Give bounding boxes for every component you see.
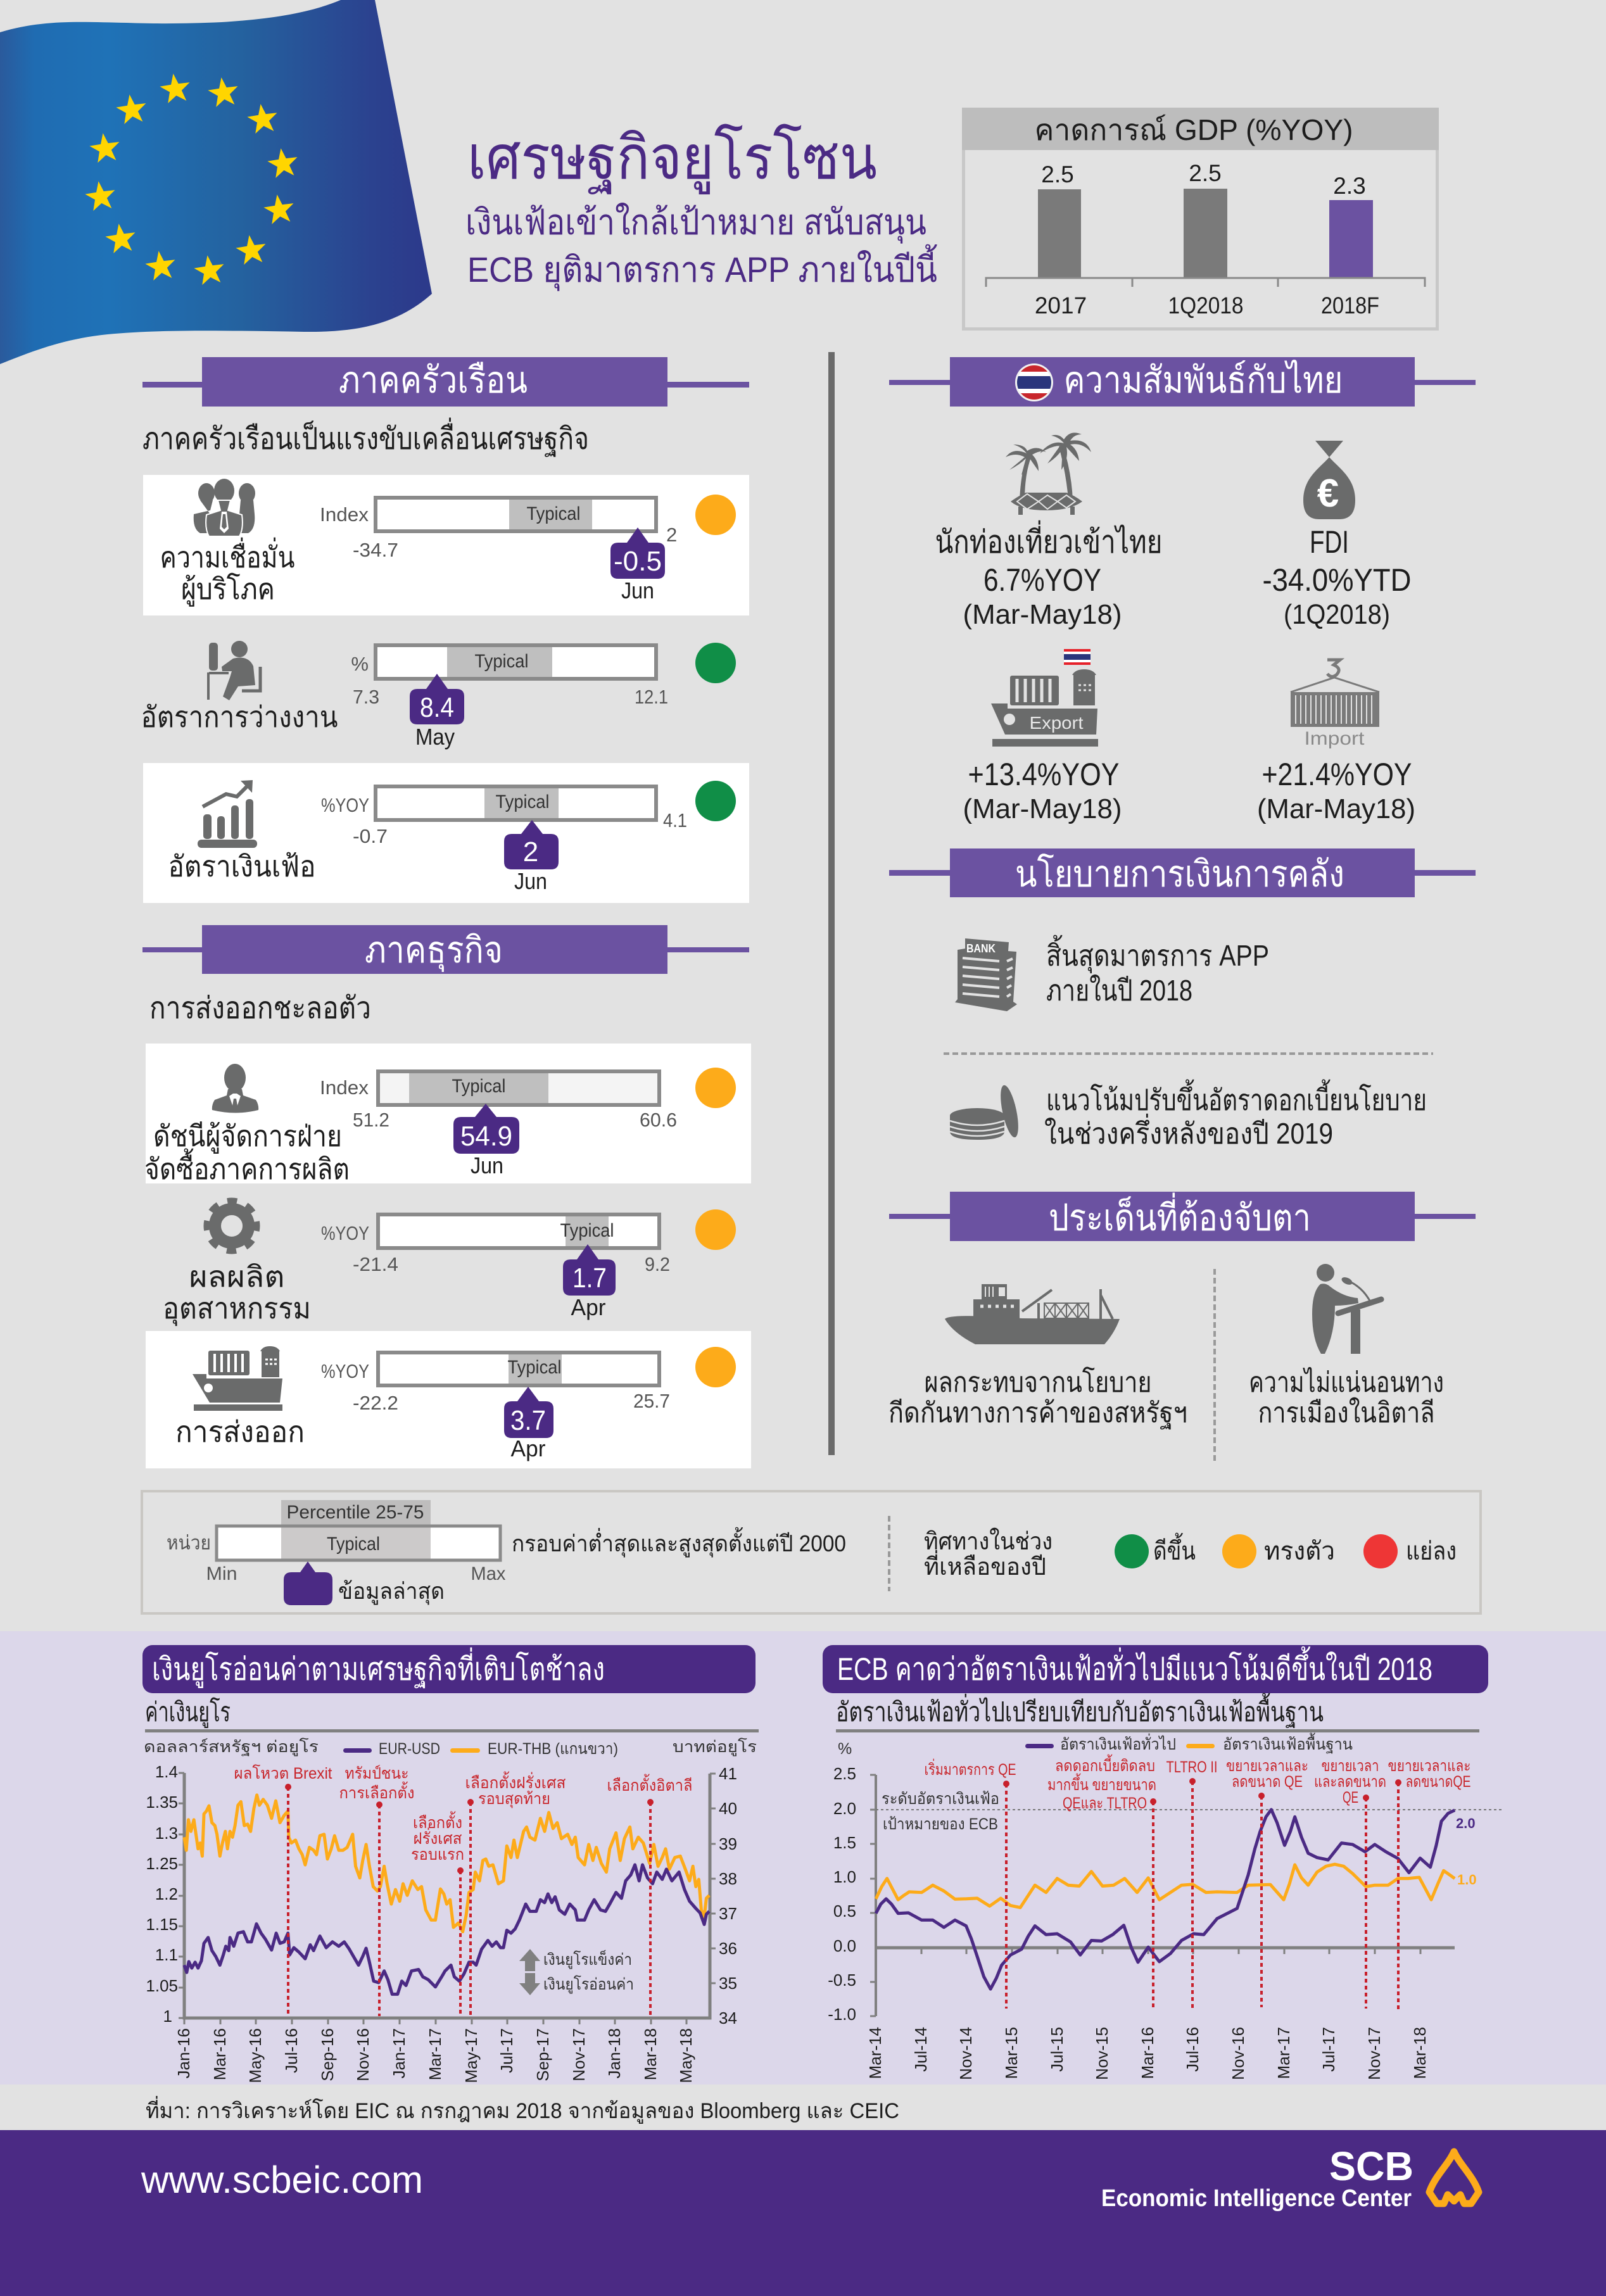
- icon: rising chart: [198, 780, 257, 848]
- heading: euro chart: [142, 1645, 756, 1693]
- line: core inflation: [876, 1864, 1455, 1908]
- axes: euro: 1: [163, 2007, 172, 2026]
- item: tourists: [935, 432, 1163, 630]
- range bar: inflation: 4.1: [663, 809, 687, 831]
- legend: direction heading: [924, 1528, 1053, 1580]
- heading: issues to watch: ประเด็นที่ต้องจับตา: [1049, 1192, 1311, 1239]
- label: consumer confidence: [160, 537, 295, 607]
- range bar: consumer confidence: [320, 498, 677, 561]
- axes: euro: Mar-17: [426, 2028, 445, 2080]
- range bar: exports: Typical: [508, 1357, 561, 1378]
- item: end of APP: [955, 935, 1269, 1011]
- chart legend: euro: ดอลลาร์สหรัฐฯ ต่อยูโร: [144, 1738, 319, 1757]
- title: [465, 124, 937, 291]
- axes: inflation: Jul-15: [1047, 2027, 1066, 2072]
- legend: range note: กรอบค่าต่ำสุดและสูงสุดตั้งแต่ปี 2000: [512, 1527, 846, 1558]
- panel: PMI: [144, 1044, 751, 1185]
- range bar: industrial production: %YOY: [321, 1222, 369, 1244]
- range bar: unemployment: 12.1: [635, 686, 668, 708]
- chart legend: inflation: อัตราเงินเฟ้อพื้นฐาน: [1223, 1732, 1353, 1753]
- annotations: ECB events: ขยายเวลาและ: [1226, 1757, 1308, 1775]
- annotations: ECB events: มากขึ้น ขยายขนาด: [1047, 1773, 1156, 1794]
- axes: euro: 1.4: [155, 1762, 178, 1781]
- icon: export ship: [991, 649, 1098, 747]
- item: exports to Thailand link: [963, 649, 1122, 824]
- item: tourists: (Mar-May18): [963, 599, 1122, 630]
- annotations: euro events: การเลือกตั้ง: [339, 1781, 414, 1802]
- label: industrial production: [163, 1260, 311, 1327]
- icon: businessman: [212, 1064, 258, 1113]
- heading: inflation chart: [823, 1645, 1488, 1693]
- axes: euro: Sep-17: [533, 2028, 552, 2081]
- label: PMI: จัดซื้อภาคการผลิต: [144, 1148, 350, 1185]
- axes: inflation: 1.0: [833, 1867, 856, 1886]
- chart legend: inflation: [838, 1732, 1353, 1758]
- range bar: PMI: [320, 1071, 677, 1131]
- axes: euro: 35: [719, 1974, 737, 1993]
- panel: inflation: [143, 763, 749, 903]
- item: Italian politics: [1249, 1264, 1444, 1429]
- bar chart: GDP: 1Q2018: [1168, 293, 1244, 319]
- marker: 2 Jun: Jun: [514, 868, 547, 894]
- annotation: ECB target: เป้าหมายของ ECB: [883, 1815, 998, 1833]
- axes: euro: Jan-16: [174, 2028, 193, 2078]
- marker: -0.5 Jun: -0.5: [614, 546, 662, 577]
- marker: 54.9 Jun: 54.9: [460, 1121, 512, 1152]
- icon: Thai flag: [1013, 363, 1055, 401]
- annotation: ECB target: [882, 1790, 999, 1833]
- item: US trade barriers: [888, 1284, 1187, 1429]
- icon: strengthen and weaken arrows: [519, 1949, 634, 1995]
- axes: euro: 1.05: [146, 1976, 178, 1995]
- chart legend: euro: บาทต่อยูโร: [673, 1738, 757, 1757]
- axes: inflation: Mar-15: [1002, 2027, 1021, 2079]
- legend: marker: [284, 1561, 445, 1605]
- icon: bank building: BANK: [966, 942, 996, 955]
- axes: euro: 36: [719, 1939, 737, 1958]
- annotations: euro events: ฝรั่งเศส: [413, 1827, 462, 1848]
- axes: euro: May-16: [246, 2028, 265, 2083]
- range bar: PMI: 51.2: [353, 1109, 389, 1131]
- logo: SCB: [1101, 2143, 1479, 2212]
- annotations: ECB events: QEและ TLTRO: [1063, 1795, 1147, 1812]
- bar chart: GDP: 2.3: [1333, 173, 1366, 199]
- axes: euro: 38: [719, 1869, 737, 1888]
- legend: sample bar: Min: [206, 1563, 237, 1584]
- range bar: inflation: [321, 786, 687, 847]
- item: tourists: นักท่องเที่ยวเข้าไทย: [935, 520, 1163, 560]
- range bar: consumer confidence: Index: [320, 503, 369, 526]
- axes: inflation: -0.5: [828, 1971, 856, 1990]
- marker: 8.4 May: [410, 674, 464, 750]
- label: PMI: ดัชนีผู้จัดการฝ่าย: [153, 1120, 342, 1154]
- annotation: ECB target: ระดับอัตราเงินเฟ้อ: [882, 1790, 999, 1808]
- subtitle: [465, 202, 937, 291]
- logo: SCB: SCB: [1329, 2143, 1413, 2189]
- panel: euro chart: [142, 1645, 759, 2083]
- item: rate hike outlook: [950, 1079, 1427, 1150]
- axes: euro: 1.3: [155, 1824, 178, 1843]
- annotations: ECB events: ขยายเวลาและ: [1388, 1757, 1470, 1775]
- status dot: stable: [695, 1209, 736, 1250]
- heading: euro chart: เงินยูโรอ่อนค่าตามเศรษฐกิจที่เติบโตช้าลง: [152, 1648, 605, 1688]
- title: เศรษฐกิจยูโรโซน: [467, 124, 877, 195]
- icon: cargo ship: [945, 1284, 1120, 1344]
- panel: inflation chart: [823, 1645, 1502, 2080]
- icon: speaker at podium: [1312, 1264, 1381, 1354]
- icon: palm hammock: [1006, 432, 1091, 515]
- annotations: euro events: [234, 1764, 693, 2016]
- annotations: euro events: ผลโหวต Brexit: [234, 1764, 332, 1782]
- end labels: 1.0: [1457, 1872, 1477, 1888]
- axes: euro: May-17: [462, 2028, 481, 2083]
- item: Italian politics: ความไม่แน่นอนทาง: [1249, 1366, 1444, 1398]
- icon: import container: Import: [1305, 728, 1365, 749]
- footer: www.scbeic.com: [141, 2159, 423, 2201]
- item: FDI: [1263, 441, 1411, 630]
- panel: consumer confidence: [143, 475, 749, 615]
- marker: 3.7 Apr: Apr: [510, 1435, 546, 1461]
- range bar: industrial production: [321, 1214, 670, 1275]
- bar chart: GDP: 2.5: [1041, 161, 1074, 187]
- chart legend: inflation: อัตราเงินเฟ้อทั่วไป: [1060, 1733, 1176, 1753]
- heading: relations with Thailand: ความสัมพันธ์กับไทย: [1064, 359, 1343, 401]
- annotations: ECB events: TLTRO II: [1167, 1758, 1217, 1776]
- range bar: consumer confidence: Typical: [527, 503, 580, 524]
- heading: issues to watch: [889, 1192, 1476, 1241]
- icon: euro money bag: €: [1317, 472, 1339, 515]
- label: PMI: [144, 1120, 350, 1185]
- annotations: ECB events: [925, 1754, 1470, 2011]
- item: Italian politics: การเมืองในอิตาลี: [1258, 1397, 1435, 1429]
- heading: households: ภาคครัวเรือน: [339, 360, 528, 401]
- heading: business: ภาคธุรกิจ: [365, 930, 503, 973]
- annotations: euro events: ทรัมป์ชนะ: [345, 1765, 409, 1782]
- range bar: PMI: Typical: [452, 1076, 505, 1097]
- item: end of APP: ภายในปี 2018: [1046, 974, 1192, 1007]
- axes: inflation: Nov-16: [1229, 2027, 1248, 2080]
- icon: strengthen and weaken arrows: เงินยูโรอ่อนค่า: [543, 1975, 634, 1994]
- status dot: improving: [695, 781, 736, 821]
- axes: inflation: 2.0: [833, 1799, 856, 1818]
- label: industrial production: อุตสาหกรรม: [163, 1292, 311, 1327]
- annotations: ECB events: ลดขนาดQE: [1406, 1773, 1470, 1791]
- axes: euro: Sep-16: [318, 2028, 337, 2081]
- footer: [0, 2130, 1606, 2296]
- range bar: consumer confidence: 2: [666, 524, 677, 546]
- axes: inflation: Jul-16: [1183, 2027, 1202, 2072]
- icon: EU flag: [0, 0, 432, 364]
- panel: euro chart: ค่าเงินยูโร: [145, 1696, 231, 1728]
- legend: sample bar: [167, 1502, 505, 1584]
- axes: euro: 1.1: [155, 1945, 178, 1964]
- icon: export ship: Export: [1030, 713, 1084, 733]
- label: inflation: อัตราเงินเฟ้อ: [168, 850, 315, 883]
- label: consumer confidence: ผู้บริโภค: [181, 572, 275, 607]
- axes: inflation: 0.5: [833, 1902, 856, 1921]
- axes: inflation: Nov-15: [1092, 2027, 1111, 2080]
- annotations: euro events: เลือกตั้ง: [413, 1811, 462, 1832]
- legend: [142, 1491, 1481, 1613]
- marker: 54.9 Jun: Jun: [471, 1152, 503, 1178]
- label: unemployment: อัตราการว่างงาน: [141, 700, 338, 733]
- axes: euro: 40: [719, 1799, 737, 1818]
- item: tourists: 6.7%YOY: [983, 562, 1101, 598]
- status dot: improving: [695, 643, 736, 683]
- icon: import container: [1291, 660, 1379, 749]
- range bar: unemployment: %: [351, 653, 369, 675]
- annotations: euro events: เลือกตั้งฝรั่งเศส: [465, 1771, 566, 1792]
- axes: euro: 1.25: [146, 1854, 178, 1873]
- heading: monetary and fiscal policy: นโยบายการเงินการคลัง: [1015, 853, 1344, 895]
- heading: monetary and fiscal policy: [889, 848, 1476, 897]
- range bar: consumer confidence: -34.7: [353, 539, 398, 561]
- range bar: PMI: Index: [320, 1076, 369, 1099]
- heading: business: [142, 925, 749, 974]
- legend: direction dots: ดีขึ้น: [1153, 1532, 1196, 1565]
- range bar: PMI: 60.6: [640, 1109, 677, 1131]
- axes: euro: Nov-16: [353, 2028, 372, 2081]
- axes: euro: 37: [719, 1904, 737, 1923]
- marker: -0.5 Jun: Jun: [621, 577, 654, 603]
- annotations: euro events: รอบสุดท้าย: [478, 1790, 550, 1808]
- heading: inflation chart: ECB คาดว่าอัตราเงินเฟ้อทั่วไปมีแนวโน้มดีขึ้นในปี 2018: [837, 1646, 1432, 1687]
- label: industrial production: ผลผลิต: [189, 1260, 285, 1293]
- legend: direction dots: แย่ลง: [1406, 1537, 1457, 1565]
- legend: sample bar: Typical: [327, 1534, 380, 1555]
- item: imports: [1257, 660, 1415, 824]
- annotations: ECB events: ลดขนาด QE: [1232, 1773, 1303, 1791]
- icon: people: [194, 479, 255, 536]
- marker: 3.7 Apr: [504, 1387, 553, 1461]
- axes: inflation: Nov-17: [1365, 2027, 1384, 2080]
- status dot: stable: [695, 1068, 736, 1108]
- axes: inflation: Jul-14: [911, 2027, 930, 2072]
- icon: coins: [950, 1084, 1021, 1140]
- legend: direction dots: ทรงตัว: [1264, 1537, 1335, 1565]
- panel: GDP forecast: คาดการณ์ GDP (%YOY): [1035, 113, 1353, 146]
- marker: 54.9 Jun: [453, 1104, 519, 1178]
- range bar: inflation: Typical: [495, 792, 550, 812]
- axes: inflation: [828, 1764, 1502, 2080]
- range bar: inflation: -0.7: [353, 825, 388, 847]
- bar chart: GDP: [986, 160, 1425, 319]
- axes: euro: Jan-18: [605, 2028, 624, 2078]
- range bar: industrial production: 9.2: [645, 1253, 670, 1275]
- marker: 2 Jun: 2: [523, 836, 538, 867]
- icon: desk worker: [208, 641, 260, 700]
- heading: households: [142, 357, 749, 407]
- axes: euro: Jul-16: [282, 2028, 301, 2073]
- icon: gear: [207, 1201, 256, 1251]
- marker: 8.4 May: 8.4: [420, 692, 454, 723]
- label: exports: การส่งออก: [175, 1415, 305, 1448]
- item: FDI: (1Q2018): [1284, 599, 1390, 630]
- end labels: 2.0: [1456, 1815, 1476, 1831]
- icon: euro money bag: [1303, 441, 1355, 519]
- axes: euro: 1.15: [146, 1915, 178, 1934]
- line: EUR-USD: [184, 1865, 709, 1994]
- marker: 2 Jun: [504, 820, 559, 894]
- legend: direction heading: ที่เหลือของปี: [924, 1550, 1046, 1580]
- marker: -0.5 Jun: [610, 527, 665, 603]
- item: US trade barriers: กีดกันทางการค้าของสหรัฐฯ: [888, 1397, 1187, 1429]
- axes: euro: 41: [719, 1764, 737, 1783]
- panel: inflation chart: อัตราเงินเฟ้อทั่วไปเปรียบเทียบกับอัตราเงินเฟ้อพื้นฐาน: [836, 1693, 1324, 1728]
- item: US trade barriers: ผลกระทบจากนโยบาย: [925, 1366, 1151, 1398]
- bar chart: GDP: 2018F: [1321, 293, 1379, 319]
- range bar: unemployment: 7.3: [353, 686, 379, 708]
- legend: sample bar: Percentile 25-75: [286, 1502, 424, 1523]
- text: business summary: การส่งออกชะลอตัว: [149, 992, 371, 1025]
- range bar: inflation: %YOY: [321, 794, 369, 816]
- range bar: exports: -22.2: [353, 1392, 398, 1414]
- axes: euro: Jul-17: [497, 2028, 516, 2073]
- range bar: industrial production: Typical: [560, 1220, 614, 1241]
- legend: direction heading: ทิศทางในช่วง: [924, 1528, 1053, 1555]
- icon: strengthen and weaken arrows: เงินยูโรแข็งค่า: [543, 1950, 632, 1969]
- item: imports: (Mar-May18): [1257, 793, 1415, 824]
- axes: inflation: 1.5: [833, 1833, 856, 1852]
- annotations: euro events: เลือกตั้งอิตาลี: [607, 1774, 693, 1795]
- item: end of APP: สิ้นสุดมาตรการ APP: [1046, 935, 1269, 974]
- axes: euro: [146, 1762, 737, 2083]
- bar chart: GDP: 2.5: [1189, 160, 1222, 186]
- annotations: euro events: รอบแรก: [411, 1846, 464, 1864]
- item: rate hike outlook: ในช่วงครึ่งหลังของปี 2019: [1044, 1113, 1333, 1150]
- annotations: ECB events: QE: [1343, 1789, 1358, 1807]
- range bar: exports: [321, 1353, 670, 1414]
- legend: marker: ข้อมูลล่าสุด: [338, 1578, 445, 1605]
- range bar: industrial production: -21.4: [353, 1253, 398, 1275]
- panel: industrial production: [163, 1201, 736, 1327]
- annotations: ECB events: และลดขนาด: [1314, 1773, 1386, 1791]
- axes: inflation: Mar-16: [1138, 2027, 1157, 2079]
- icon: container ship: [193, 1346, 282, 1411]
- axes: euro: 39: [719, 1834, 737, 1853]
- legend: direction dots: [1115, 1532, 1457, 1568]
- range bar: exports: 25.7: [633, 1390, 670, 1412]
- subtitle: ECB ยุติมาตรการ APP ภายในปีนี้: [467, 244, 937, 291]
- axes: euro: 34: [719, 2009, 737, 2028]
- axes: inflation: -1.0: [828, 2005, 856, 2024]
- text: households summary: ภาคครัวเรือนเป็นแรงขับเคลื่อนเศรษฐกิจ: [142, 417, 589, 457]
- marker: 8.4 May: May: [415, 724, 455, 750]
- item: exports to Thailand link: (Mar-May18): [963, 793, 1122, 824]
- item: exports to Thailand link: +13.4%YOY: [968, 757, 1120, 792]
- axes: inflation: Mar-14: [866, 2027, 885, 2079]
- axes: euro: 1.2: [155, 1884, 178, 1903]
- end labels: [1456, 1815, 1477, 1888]
- legend: sample bar: Max: [471, 1563, 505, 1584]
- item: FDI: -34.0%YTD: [1263, 562, 1411, 598]
- source note: ที่มา: การวิเคราะห์โดย EIC ณ กรกฎาคม 2018 จากข้อมูลของ Bloomberg และ CEIC: [146, 2096, 899, 2124]
- axes: inflation: Nov-14: [956, 2027, 975, 2080]
- chart legend: euro: EUR-THB (แกนขวา): [488, 1740, 618, 1758]
- subtitle: เงินเฟ้อเข้าใกล้เป้าหมาย สนับสนุน: [465, 202, 926, 244]
- marker: 1.7 Apr: Apr: [571, 1294, 606, 1320]
- axes: euro: May-18: [676, 2028, 695, 2083]
- line: EUR-THB: [184, 1795, 709, 1932]
- chart legend: inflation: %: [838, 1740, 852, 1758]
- item: FDI: FDI: [1310, 524, 1349, 560]
- marker: 3.7 Apr: 3.7: [510, 1405, 546, 1436]
- line: headline inflation: [876, 1810, 1455, 1989]
- annotations: ECB events: เริ่มมาตรการ QE: [925, 1758, 1016, 1779]
- axes: euro: 1.35: [146, 1793, 178, 1812]
- panel: unemployment: [141, 641, 736, 750]
- axes: euro: Mar-16: [210, 2028, 229, 2080]
- annotations: ECB events: ขยายเวลา: [1321, 1757, 1379, 1775]
- axes: inflation: 0.0: [833, 1936, 856, 1955]
- status dot: stable: [695, 1347, 736, 1387]
- status dot: stable: [695, 495, 736, 535]
- marker: 1.7 Apr: 1.7: [572, 1263, 607, 1294]
- panel: GDP forecast: [962, 108, 1439, 329]
- axes: inflation: Mar-18: [1410, 2027, 1429, 2079]
- label: consumer confidence: ความเชื่อมั่น: [160, 537, 295, 574]
- axes: inflation: Jul-17: [1319, 2027, 1338, 2072]
- panel: exports: [146, 1331, 751, 1468]
- axes: euro: Jan-17: [389, 2028, 408, 2078]
- axes: inflation: Mar-17: [1274, 2027, 1293, 2079]
- bar chart: GDP: 2017: [1035, 293, 1087, 319]
- legend: sample bar: หน่วย: [167, 1532, 211, 1554]
- icon: bank building: [955, 938, 1017, 1011]
- annotations: ECB events: ลดดอกเบี้ยติดลบ: [1055, 1754, 1155, 1775]
- item: rate hike outlook: แนวโน้มปรับขึ้นอัตราดอกเบี้ยนโยบาย: [1046, 1079, 1427, 1116]
- chart legend: euro: EUR-USD: [379, 1740, 440, 1758]
- axes: euro: Mar-18: [641, 2028, 660, 2080]
- marker: 1.7 Apr: [563, 1244, 616, 1320]
- heading: relations with Thailand: [889, 357, 1476, 407]
- axes: inflation: 2.5: [833, 1764, 856, 1783]
- range bar: exports: %YOY: [321, 1360, 369, 1382]
- logo: SCB: Economic Intelligence Center: [1101, 2185, 1412, 2212]
- item: imports: +21.4%YOY: [1261, 757, 1412, 792]
- range bar: unemployment: Typical: [475, 651, 528, 672]
- range bar: unemployment: [351, 645, 668, 708]
- chart legend: euro: [144, 1738, 757, 1758]
- axes: euro: Nov-17: [569, 2028, 588, 2081]
